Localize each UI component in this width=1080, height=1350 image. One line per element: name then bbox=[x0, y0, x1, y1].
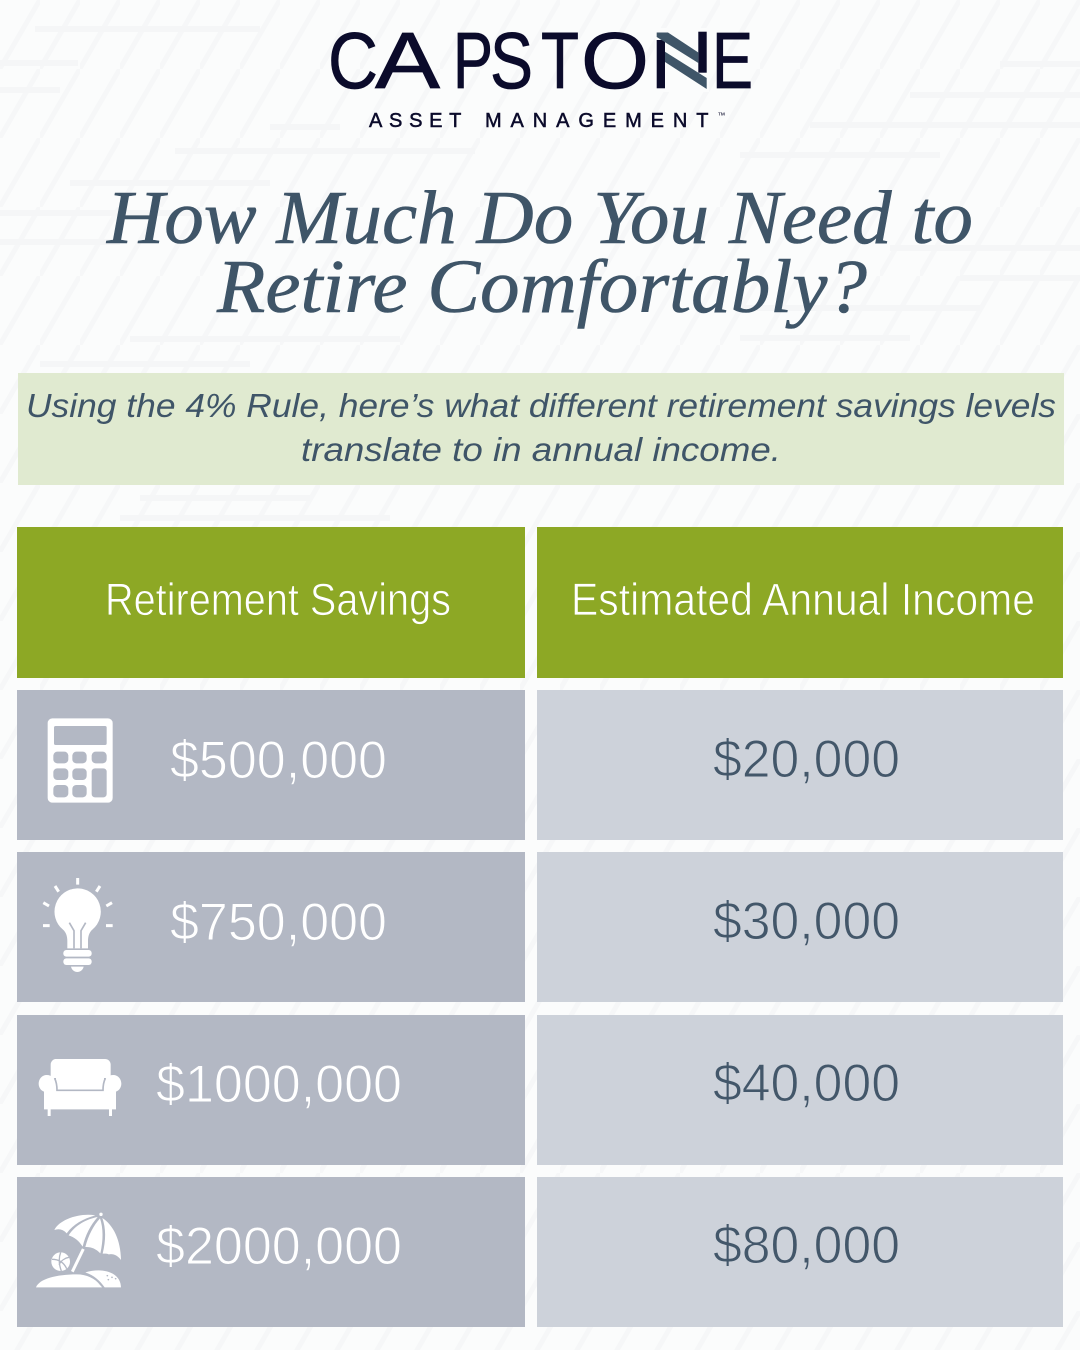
amount: $1000,000 bbox=[156, 1055, 402, 1114]
logo wordmark: C bbox=[328, 16, 378, 105]
logo: Capstone Asset Management bbox=[328, 16, 753, 132]
amount: $750,000 bbox=[170, 893, 387, 952]
row: $2000,000 savings bbox=[17, 1177, 525, 1327]
logo wordmark: P bbox=[453, 16, 493, 105]
icon: calculator bbox=[48, 718, 113, 803]
logo tagline: ™ bbox=[717, 111, 725, 120]
row: $20,000 income bbox=[537, 690, 1063, 840]
logo wordmark: S bbox=[490, 16, 533, 105]
row: $750,000 savings bbox=[17, 852, 525, 1002]
table header: Estimated Annual Income bbox=[537, 527, 1063, 678]
table header: Retirement Savings: Retirement Savings bbox=[105, 574, 451, 625]
table header: Retirement Savings bbox=[17, 527, 525, 678]
row: $40,000 income: $40,000 bbox=[713, 1054, 900, 1113]
panel: 4% rule intro bbox=[18, 373, 1064, 485]
icon: beach umbrella bbox=[36, 1213, 121, 1287]
row: $80,000 income bbox=[537, 1177, 1063, 1327]
row: $30,000 income bbox=[537, 852, 1063, 1002]
logo wordmark: A bbox=[375, 16, 441, 105]
logo wordmark: E bbox=[712, 16, 753, 105]
title bbox=[106, 176, 973, 329]
table header: Estimated Annual Income: Estimated Annual Income bbox=[571, 574, 1035, 625]
icon: sofa bbox=[39, 1059, 121, 1116]
row: $500,000 savings bbox=[17, 690, 525, 840]
logo wordmark bbox=[328, 16, 753, 105]
row: $80,000 income: $80,000 bbox=[713, 1216, 900, 1275]
row: $40,000 income bbox=[537, 1015, 1063, 1165]
intro text bbox=[26, 387, 1056, 468]
title: Retire Comfortably? bbox=[216, 245, 867, 329]
logo wordmark: O bbox=[581, 16, 649, 105]
amount: $2000,000 bbox=[156, 1217, 402, 1276]
icon: light bulb bbox=[43, 878, 113, 972]
logo wordmark: T bbox=[541, 16, 579, 105]
amount: $500,000 bbox=[170, 731, 387, 790]
intro text: Using the 4% Rule, here’s what different retirement savings levels bbox=[26, 387, 1056, 424]
logo tagline: ASSET bbox=[369, 110, 468, 132]
intro text: translate to in annual income. bbox=[301, 431, 781, 468]
row: $30,000 income: $30,000 bbox=[713, 892, 900, 951]
row: $20,000 income: $20,000 bbox=[713, 730, 900, 789]
row: $1000,000 savings bbox=[17, 1015, 525, 1165]
logo tagline: MANAGEMENT bbox=[485, 110, 717, 132]
title: How Much Do You Need to bbox=[106, 176, 973, 260]
logo wordmark: N bbox=[652, 16, 710, 105]
